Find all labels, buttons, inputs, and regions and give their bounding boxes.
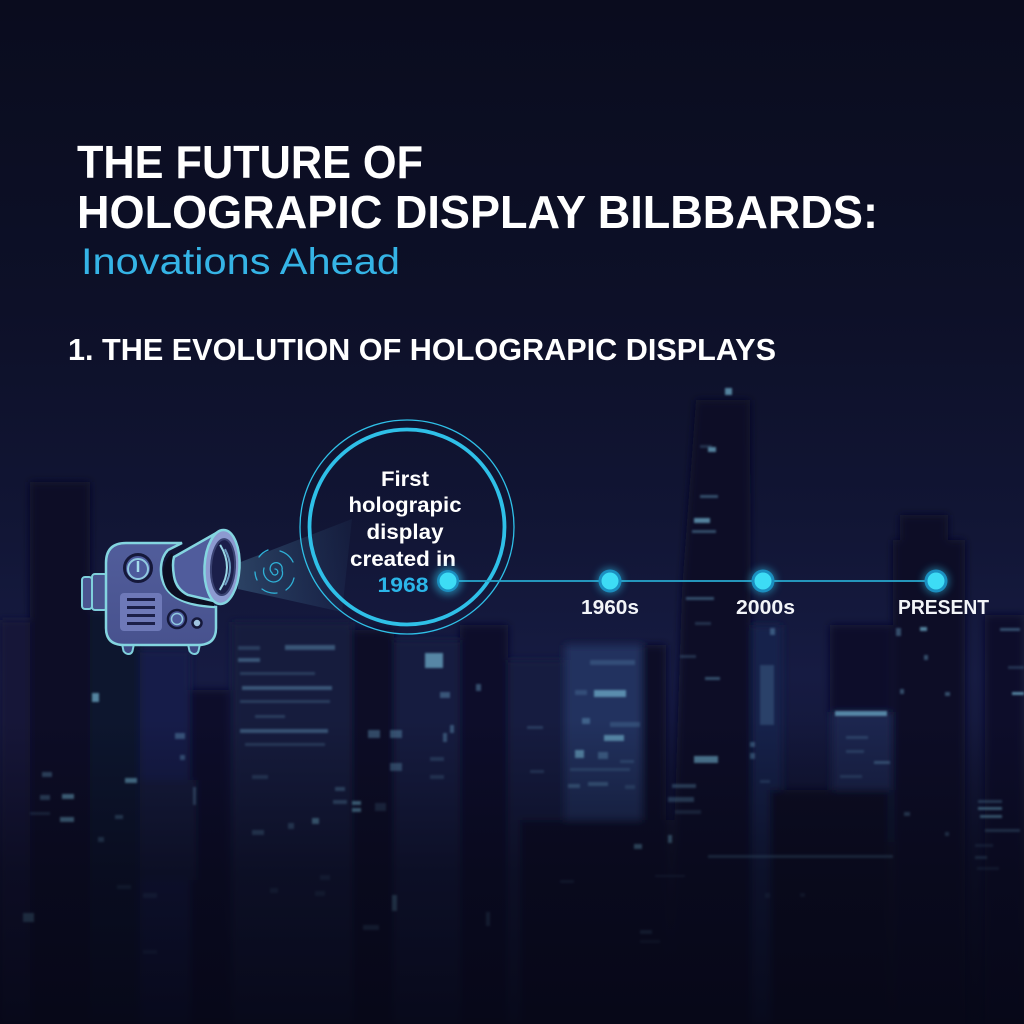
callout text: First <box>381 467 429 491</box>
timeline label: 2000s: 2000s <box>736 597 795 619</box>
projector cone <box>173 532 218 602</box>
background: medium building windows <box>40 495 1020 934</box>
callout text: holograpic <box>348 493 462 517</box>
section heading: 1. THE EVOLUTION OF HOLOGRAPIC DISPLAYS <box>68 332 776 367</box>
background: city skyline buildings <box>0 400 1024 1024</box>
title <box>77 136 878 238</box>
background: bottom darkening <box>0 720 1024 1024</box>
projector cone shadow <box>163 553 214 606</box>
title: THE FUTURE OF <box>77 136 423 188</box>
timeline label: present: PRESENT <box>898 597 989 619</box>
title: HOLOGRAPIC DISPLAY BILBBARDS: <box>77 186 878 238</box>
icon: holographic projector <box>82 529 241 654</box>
timeline node: 1960s <box>597 568 623 594</box>
projector rear lens <box>82 574 107 610</box>
projector feet <box>122 644 200 654</box>
projection beam <box>238 519 352 612</box>
projector lens <box>203 529 241 605</box>
callout text: display <box>366 520 444 544</box>
timeline node: present <box>923 568 949 594</box>
callout text: created in <box>350 547 456 571</box>
callout text: 1968 <box>378 573 429 597</box>
timeline node: 2000s <box>750 568 776 594</box>
projector small dial <box>168 610 186 628</box>
timeline label: 1960s: 1960s <box>581 597 639 619</box>
background: dim building windows <box>30 445 1024 954</box>
projector vent panel <box>120 593 162 631</box>
timeline line <box>448 580 936 582</box>
callout circle <box>300 420 514 634</box>
projector indicator light <box>192 618 202 628</box>
background: bright building windows <box>23 388 1024 922</box>
projector power dial <box>124 554 152 582</box>
timeline node: 1968 <box>434 567 462 595</box>
projector body <box>106 543 216 645</box>
icon: hologram spiral <box>255 550 294 593</box>
subtitle: Inovations Ahead <box>81 241 400 282</box>
callout text <box>348 467 462 597</box>
